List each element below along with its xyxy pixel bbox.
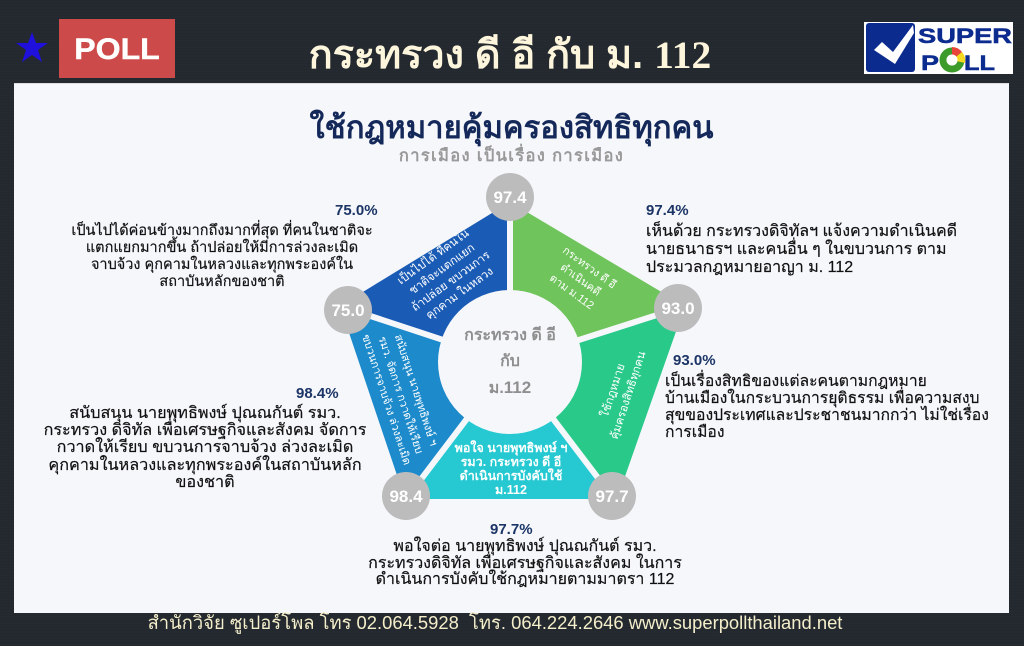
- node: 97.7: 97.7: [595, 487, 629, 506]
- text: กระทรวงดิจิทัล เพื่อเศรษฐกิจและสังคม ในการ: [368, 554, 682, 572]
- text: 98.4%: [296, 385, 339, 402]
- logo: super poll: SUPER: [918, 25, 1012, 48]
- node: 75.0: [324, 286, 372, 334]
- segment: green: [510, 202, 685, 362]
- segment label: blue: สนับสนุน นายพุทธิพงษ์ ฯ: [392, 333, 439, 447]
- text: กระทรวง ดิจิทัล เพื่อเศรษฐกิจและสังคม จัดการ: [44, 421, 366, 439]
- text: 75.0%: [335, 202, 378, 219]
- text: แตกแยกมากขึ้น ถ้าปล่อยให้มีการล่วงละเมิด: [86, 240, 358, 256]
- poll badge: [59, 19, 175, 78]
- text: 93.0%: [673, 352, 716, 369]
- text: พอใจต่อ นายพุทธิพงษ์ ปุณณกันต์ รมว.: [393, 538, 657, 555]
- text: บ้านเมืองในกระบวนการยุติธรรม เพื่อความสงบ: [665, 390, 980, 407]
- segment label: dark blue: ชาติจะแตกแยก: [407, 242, 477, 297]
- text: เป็นเรื่องสิทธิของแต่ละคนตามกฎหมาย: [665, 373, 927, 390]
- text: นายธนาธรฯ และคนอื่น ๆ ในขบวนการ ตาม: [646, 241, 947, 258]
- text: เป็นไปได้ค่อนข้างมากถึงมากที่สุด ที่คนในชาติจะ: [71, 223, 373, 239]
- node: 97.7: [588, 472, 636, 520]
- main panel: [14, 83, 1009, 613]
- segment label: cyan: [454, 440, 567, 497]
- center label: กระทรวง ดี อี: [464, 327, 556, 344]
- text: ของชาติ: [175, 473, 235, 491]
- segment label: green: [547, 245, 618, 312]
- title: กระทรวง ดี อี กับ ม. 112: [309, 33, 711, 77]
- segment label: green: ตาม ม.112: [547, 272, 596, 312]
- node: 75.0: 75.0: [331, 301, 365, 320]
- node: 97.4: 97.4: [493, 188, 527, 207]
- segment label: dark blue: คุกคาม ในหลวง: [424, 266, 496, 322]
- text: จาบจ้วง คุกคามในหลวงและทุกพระองค์ใน: [91, 257, 353, 273]
- segment label: green: กระทรวง ดี อี: [560, 245, 618, 291]
- segment label: cyan: รมว. กระทรวง ดี อี: [461, 455, 561, 469]
- center circle: [438, 290, 582, 434]
- segment label: dark blue: ถ้าปล่อย ขบวนการ: [410, 249, 493, 314]
- segment: teal green: [510, 306, 685, 499]
- poll badge: POLL: [74, 33, 159, 66]
- segment label: cyan: ดำเนินการบังคับใช้: [460, 469, 562, 483]
- segment label: blue: ขบวนการจาบจ้วง ล่วงละเมิด: [359, 333, 413, 467]
- text: ดำเนินการบังคับใช้กฎหมายตามมาตรา 112: [376, 571, 674, 588]
- center label: ม.112: [489, 378, 531, 397]
- segment label: blue: รมว. จัดการ กวาดให้เรียบ: [376, 335, 425, 455]
- segment label: cyan: ม.112: [495, 483, 527, 497]
- segment gaps: [340, 197, 685, 503]
- center label: กับ: [500, 353, 520, 370]
- text: 97.4%: [646, 202, 689, 219]
- text: 97.7%: [490, 521, 533, 538]
- star icon: [16, 32, 48, 62]
- heading: ใช้กฎหมายคุ้มครองสิทธิทุกคน: [310, 110, 713, 145]
- segment label: blue: [359, 333, 439, 467]
- segment label: green: ดำเนินคดี: [558, 262, 603, 299]
- center label: [464, 326, 556, 397]
- segment label: dark blue: [395, 227, 496, 322]
- text: การเมือง: [665, 424, 725, 441]
- segment: cyan: [405, 362, 617, 499]
- node: 98.4: 98.4: [389, 487, 423, 506]
- segment label: cyan: พอใจ นายพุทธิพงษ์ ฯ: [455, 441, 567, 455]
- node: 93.0: 93.0: [661, 299, 695, 318]
- node: 98.4: [382, 472, 430, 520]
- text: สถาบันหลักของชาติ: [159, 274, 285, 290]
- callout: 97.4 percent: [646, 202, 957, 276]
- footer: สำนักวิจัย ซูเปอร์โพล โทร 02.064.5928 โทร. 064.224.2646 www.superpollthailand.net: [148, 612, 842, 633]
- logo: super poll: [864, 22, 1013, 74]
- segment: dark blue: [340, 202, 510, 362]
- callout: 75.0 percent: [71, 202, 378, 290]
- segment label: teal green: ใช้กฎหมาย: [599, 362, 628, 419]
- segment label: dark blue: เป็นไปได้ ที่คนใน: [395, 227, 471, 287]
- text: กวาดให้เรียบ ขบวนการจาบจ้วง ล่วงละเมิด: [57, 438, 353, 456]
- segment label: teal green: คุ้มครองสิทธิทุกคน: [609, 350, 648, 441]
- callout: 93.0 percent: [665, 352, 989, 441]
- callout: 98.4 percent: [44, 385, 366, 491]
- node: 93.0: [654, 284, 702, 332]
- node: 97.4: [486, 173, 534, 221]
- subheading: การเมือง เป็นเรื่อง การเมือง: [399, 147, 624, 165]
- text: เห็นด้วย กระทรวงดิจิทัลฯ แจ้งความดำเนินคดี: [646, 223, 957, 240]
- text: ประมวลกฎหมายอาญา ม. 112: [646, 259, 853, 276]
- segment: blue: [340, 306, 510, 499]
- text: คุกคามในหลวงและทุกพระองค์ในสถาบันหลัก: [48, 456, 362, 474]
- text: สุขของประเทศและประชาชนมากกว่า ไม่ใช่เรื่อง: [665, 407, 989, 424]
- callout: 97.7 percent: [368, 521, 682, 588]
- text: สนับสนุน นายพุทธิพงษ์ ปุณณกันต์ รมว.: [69, 404, 341, 422]
